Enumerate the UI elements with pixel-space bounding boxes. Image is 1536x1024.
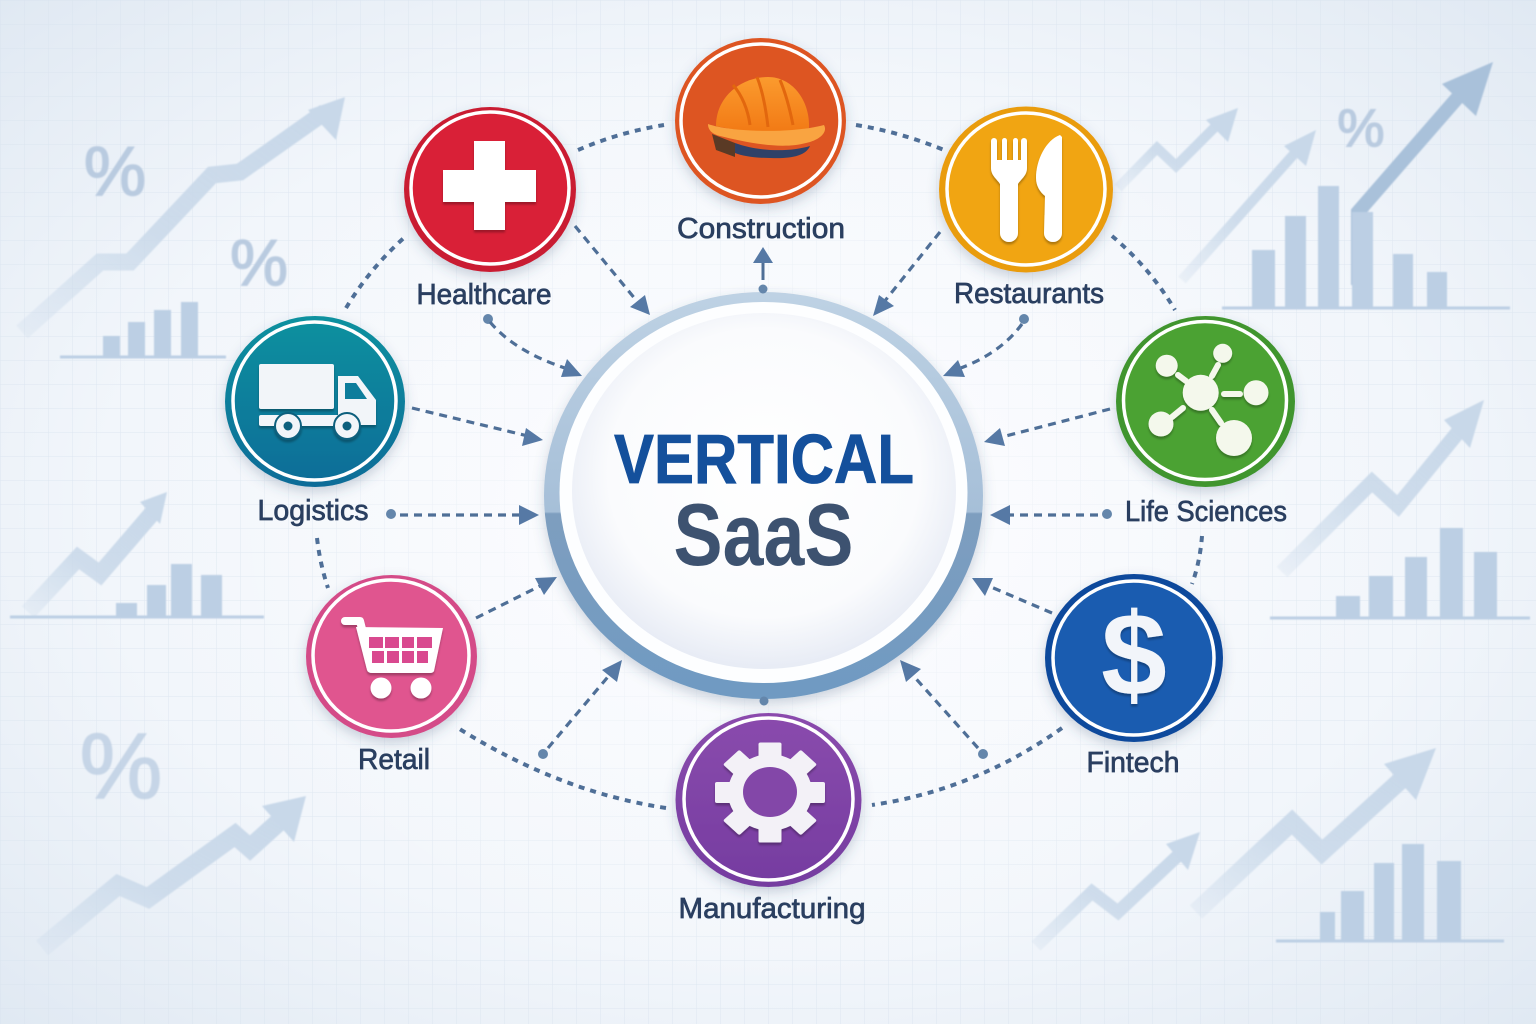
node: Construction — [675, 38, 846, 245]
label: Logistics — [258, 495, 368, 527]
decoration: top-left growth chart: % — [230, 226, 288, 299]
decoration: top-right growth chart: % — [1337, 99, 1385, 158]
icon: dollar sign: $ — [1101, 589, 1167, 721]
icon: medical cross — [404, 107, 576, 272]
hub outer ring — [544, 292, 983, 699]
dashed connector ring — [317, 125, 1202, 808]
icon: shopping cart — [306, 575, 477, 738]
node: Healthcare — [404, 107, 576, 311]
node: Fintech — [1045, 574, 1223, 779]
decoration: bottom-left growth chart — [42, 714, 306, 948]
label: Manufacturing — [678, 893, 866, 925]
node: Retail — [306, 575, 477, 776]
decoration: top-left growth chart: % — [84, 132, 146, 210]
icon: dollar sign — [1045, 574, 1223, 742]
hub bottom dot — [760, 696, 768, 706]
label: Construction — [677, 213, 845, 245]
node: Life Sciences — [1116, 316, 1295, 528]
hub white band — [560, 302, 968, 683]
icon: fork and knife — [939, 106, 1113, 272]
node: Logistics — [225, 316, 405, 527]
label: Life Sciences — [1125, 496, 1287, 528]
icon: gear — [676, 713, 862, 887]
decoration: mid-left growth chart — [10, 492, 264, 617]
label: Fintech — [1086, 747, 1180, 779]
hub title: VERTICAL — [614, 420, 914, 498]
decoration: top-left growth chart — [22, 97, 345, 357]
label: Retail — [358, 744, 430, 776]
decoration: mid-right growth chart — [1270, 400, 1530, 618]
central hub — [544, 284, 983, 706]
decoration: bottom-left growth chart: % — [80, 714, 162, 818]
label: Restaurants — [954, 278, 1104, 310]
arrows into hub — [386, 226, 1112, 759]
icon: delivery truck — [225, 316, 405, 487]
icon: hard hat — [675, 38, 846, 204]
decoration: bottom-right growth chart — [1036, 748, 1504, 946]
node: Restaurants — [939, 106, 1113, 310]
node: Manufacturing — [676, 713, 866, 925]
hub disc — [572, 313, 956, 669]
label: Healthcare — [416, 279, 552, 311]
icon: molecule network — [1116, 316, 1295, 487]
decoration: top-right growth chart — [1118, 62, 1510, 308]
hub subtitle: SaaS — [674, 485, 854, 584]
hub top dot — [758, 284, 768, 294]
